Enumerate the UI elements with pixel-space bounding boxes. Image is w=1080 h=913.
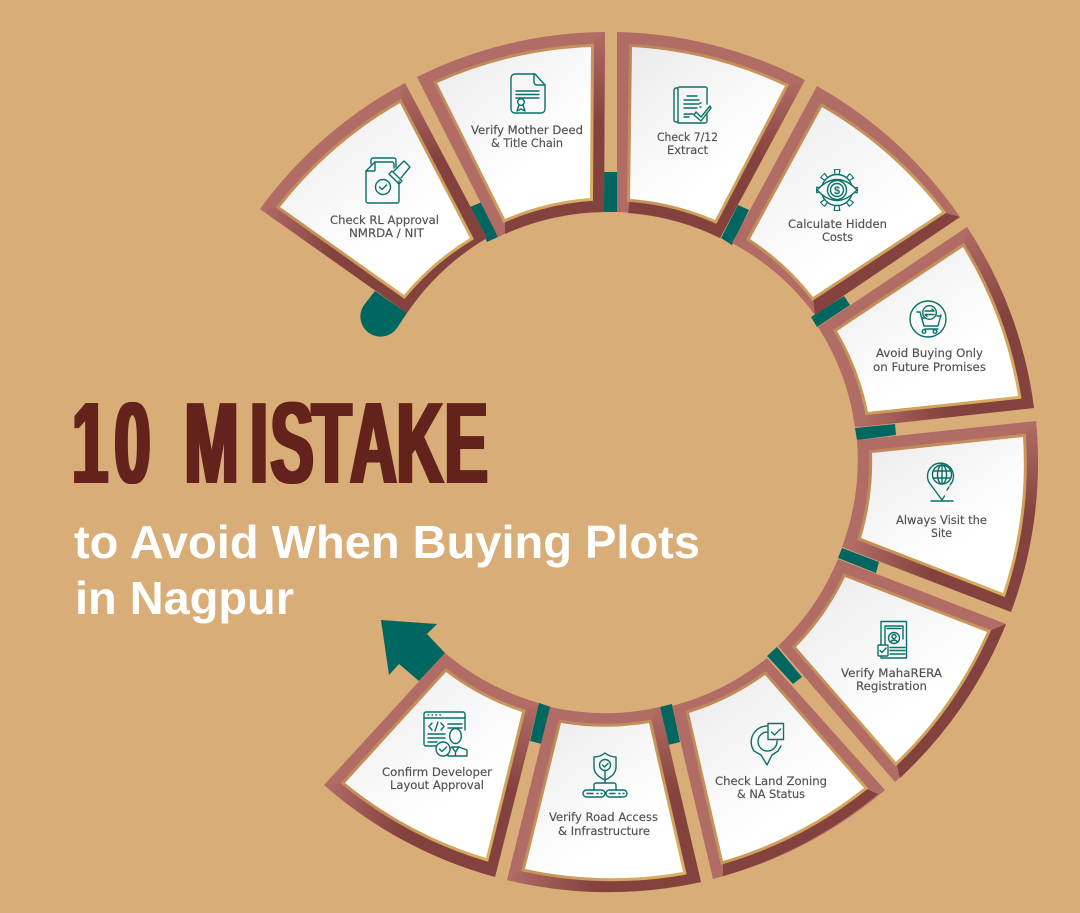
panel: Verify MahaRERA Registration: [778, 559, 1006, 782]
label: Check 7/12: [657, 130, 718, 144]
label: Registration: [856, 679, 927, 693]
panel: Confirm Developer Layout Approval: [324, 653, 539, 877]
label: [657, 130, 718, 157]
icon: gear eye with dollar: $: [834, 185, 840, 197]
icon: land zoning pin: [751, 724, 784, 765]
label: Always Visit the: [896, 513, 987, 527]
label: & NA Status: [737, 787, 805, 801]
label: NMRDA / NIT: [349, 226, 425, 240]
icon: checklist extract: [674, 87, 711, 123]
label: [549, 810, 658, 838]
label: & Infrastructure: [558, 824, 650, 838]
label: [873, 346, 986, 374]
icon: title deed: [511, 74, 545, 113]
panel: Check Land Zoning & NA Status: [672, 658, 885, 879]
label: [330, 213, 439, 240]
panel: Verify Road Access & Infrastructure: [507, 707, 701, 892]
icon: shield network: [583, 753, 627, 797]
label: [896, 513, 987, 540]
label: Verify Mother Deed: [471, 123, 583, 137]
label: & Title Chain: [491, 136, 563, 150]
label: Costs: [822, 230, 853, 244]
label: Verify Road Access: [549, 810, 658, 824]
label: [382, 765, 492, 792]
label: on Future Promises: [873, 360, 986, 374]
icon: gear eye with dollar: [817, 172, 857, 208]
label: Extract: [667, 143, 708, 157]
icon: registration certificate: [878, 622, 906, 658]
panel: Check RL Approval: [260, 83, 487, 313]
subtitle: to Avoid When Buying Plots: [74, 516, 700, 568]
arrow head: [381, 620, 445, 681]
label: Verify MahaRERA: [841, 666, 942, 680]
label: [471, 123, 583, 150]
panel: Always Visit the Site: [842, 421, 1038, 612]
label: Layout Approval: [390, 778, 484, 792]
label: Calculate Hidden: [788, 217, 887, 231]
icon: stamped document: [366, 158, 410, 203]
panel: Avoid Buying Only on Future Promises: [818, 227, 1034, 427]
icon: globe location pin: [928, 463, 954, 501]
label: Check Land Zoning: [715, 774, 827, 788]
label: Confirm Developer: [382, 765, 492, 779]
subtitle: [74, 516, 700, 624]
label: [715, 774, 827, 801]
label: Site: [931, 526, 952, 540]
label: Check RL Approval: [330, 213, 439, 227]
panel: Verify Mother Deed: [417, 32, 605, 237]
subtitle: in Nagpur: [75, 572, 294, 624]
teal connectors between segments: [470, 172, 896, 745]
icon: developer approval window: [424, 712, 467, 756]
teal tail of ring arrow: [360, 291, 407, 337]
label: [788, 217, 887, 244]
panel: Check 7/12 Extract: [617, 32, 805, 238]
label: [841, 666, 942, 693]
title: 10 MISTAKE: [72, 378, 488, 508]
icon: shopping cart: [910, 301, 946, 337]
label: Avoid Buying Only: [876, 346, 983, 360]
panel: Calculate Hidden Costs: [732, 86, 960, 315]
